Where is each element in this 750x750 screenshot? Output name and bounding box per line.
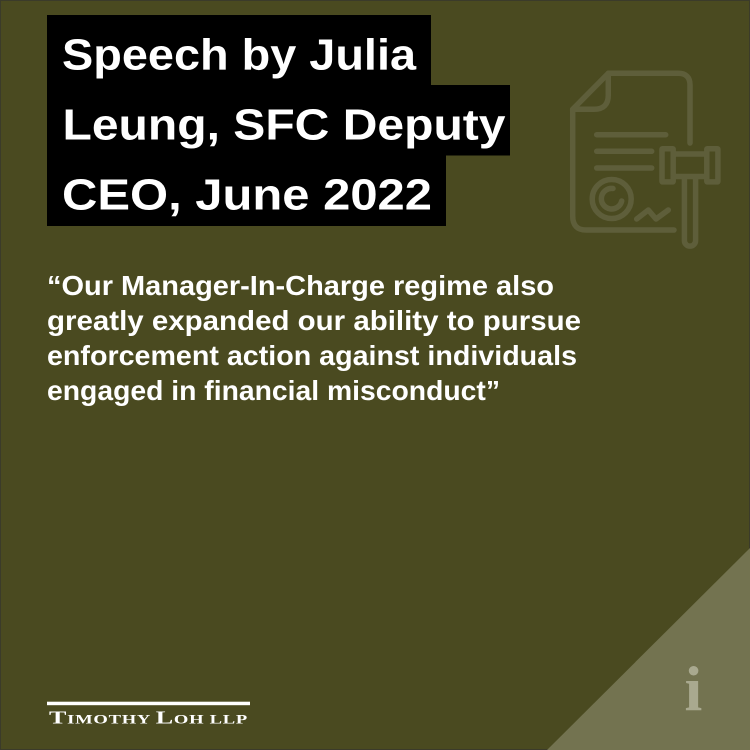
title — [47, 15, 510, 226]
logo: Timothy Loh LLP — [47, 702, 250, 727]
title text: CEO, June 2022 — [62, 170, 432, 220]
quote text — [47, 270, 581, 406]
quote text: engaged in financial misconduct” — [47, 375, 500, 406]
title highlight bars — [47, 15, 510, 226]
title text: Speech by Julia — [62, 30, 417, 80]
quote text: “Our Manager-In-Charge regime also — [47, 270, 554, 301]
title text — [62, 30, 506, 220]
quote text: enforcement action against individuals — [47, 340, 577, 371]
title text: Leung, SFC Deputy — [62, 100, 506, 150]
corner triangle — [547, 548, 750, 750]
logo rule — [47, 702, 250, 705]
logo wordmark: T IMOTHY L OH LLP — [49, 707, 248, 727]
quote text: greatly expanded our ability to pursue — [47, 305, 581, 336]
icon: information: i — [684, 653, 702, 724]
icon: document with gavel — [573, 73, 718, 246]
